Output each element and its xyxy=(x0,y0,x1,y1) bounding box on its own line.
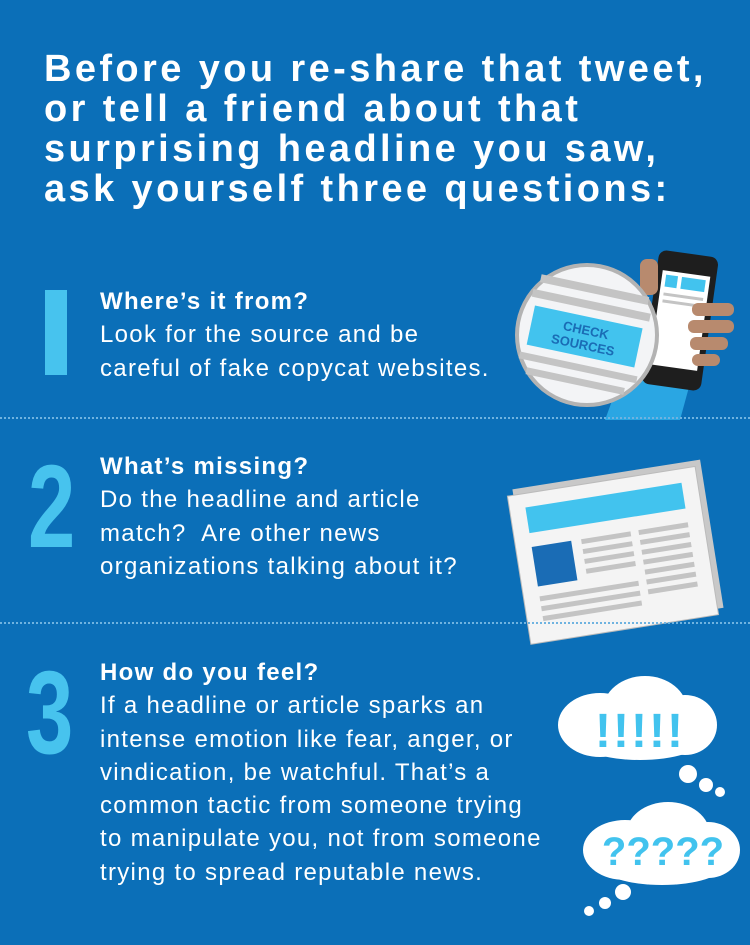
title: Before you re-share that tweet, xyxy=(44,48,707,90)
icon: thought clouds: ????? xyxy=(602,830,724,874)
section 1 text xyxy=(100,288,490,382)
section 1 text: Where’s it from? xyxy=(100,288,309,315)
number 3: 3 xyxy=(26,647,73,779)
title: ask yourself three questions: xyxy=(44,168,671,210)
section 1 text: Look for the source and be xyxy=(100,321,419,348)
icon: phone with magnifier: SOURCES xyxy=(550,331,616,359)
section 3 text: intense emotion like fear, anger, or xyxy=(100,726,514,753)
section 3 text: to manipulate you, not from someone xyxy=(100,825,542,852)
section 3 text: common tactic from someone trying xyxy=(100,792,523,819)
icon: phone with magnifier: CHECK xyxy=(562,318,611,342)
title: surprising headline you saw, xyxy=(44,128,659,170)
section 2 text: Do the headline and article xyxy=(100,486,421,513)
title xyxy=(44,48,707,210)
number 1 xyxy=(45,290,67,375)
icon: phone with magnifier xyxy=(515,250,734,420)
section 3 text: How do you feel? xyxy=(100,659,319,686)
title: or tell a friend about that xyxy=(44,88,581,130)
section 3 text: vindication, be watchful. That’s a xyxy=(100,759,490,786)
section 2 text: What’s missing? xyxy=(100,453,309,480)
section 2 text: match? Are other news xyxy=(100,520,381,547)
icon: thought clouds: !!!!! xyxy=(595,705,685,758)
section 3 text: If a headline or article sparks an xyxy=(100,692,484,719)
section 2 text: organizations talking about it? xyxy=(100,553,458,580)
section 3 text xyxy=(100,659,542,886)
section 3 text: trying to spread reputable news. xyxy=(100,859,483,886)
icon: thought clouds xyxy=(558,676,740,916)
icon: newspaper xyxy=(506,460,724,645)
number 2: 2 xyxy=(28,441,75,573)
section 1 text: careful of fake copycat websites. xyxy=(100,355,490,382)
section 2 text xyxy=(100,453,458,580)
